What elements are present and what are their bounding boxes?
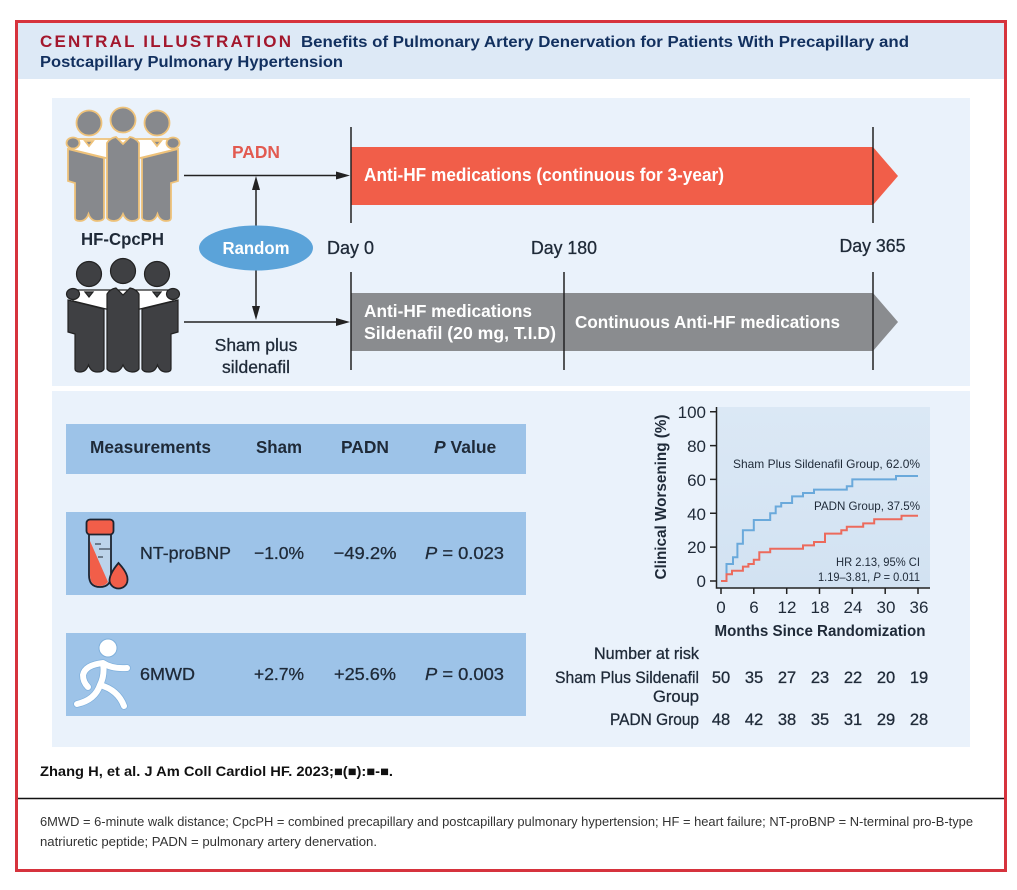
label: PADN: PADN xyxy=(232,142,280,162)
random ellipse: Random xyxy=(222,238,290,258)
random ellipse xyxy=(199,226,313,270)
y axis ticks: 60 xyxy=(687,471,706,490)
abbreviations footnote: 6MWD = 6-minute walk distance; CpcPH = combined precapillary and postcapillary pulmonary hypertension; HF = heart failure; NT-proBNP = N-terminal pro-B-type xyxy=(40,815,973,829)
timeline markers xyxy=(351,127,873,370)
bar: sham medications gray: Sildenafil (20 mg, T.I.D) xyxy=(364,323,556,343)
row text: NT-proBNP xyxy=(140,543,231,563)
icon: blood test tube xyxy=(86,520,128,589)
x axis ticks: 36 xyxy=(910,598,928,617)
chart annotations: PADN Group, 37.5% xyxy=(814,499,920,513)
y axis ticks: 100 xyxy=(678,403,706,422)
row text: P = 0.003 xyxy=(425,664,504,684)
x axis ticks: 12 xyxy=(778,598,796,617)
timeline day labels xyxy=(327,236,906,258)
number at risk table: 19 xyxy=(910,669,928,687)
number at risk table: 23 xyxy=(811,669,829,687)
chart annotations: Sham Plus Sildenafil Group, 62.0% xyxy=(733,457,920,471)
number at risk table: 20 xyxy=(877,669,895,687)
table header row xyxy=(66,424,526,474)
x axis ticks: 0 xyxy=(716,598,726,617)
x axis ticks xyxy=(716,598,928,617)
row text: 6MWD xyxy=(140,664,195,684)
row text xyxy=(140,543,504,563)
x axis ticks: 18 xyxy=(811,598,829,617)
y axis ticks: 0 xyxy=(697,572,706,591)
y axis ticks: 40 xyxy=(687,505,706,524)
row text: −49.2% xyxy=(334,543,396,563)
row text: +25.6% xyxy=(334,664,396,684)
y axis title: Clinical Worsening (%) xyxy=(653,414,670,580)
x axis ticks: 24 xyxy=(844,598,862,617)
timeline day labels: Day 0 xyxy=(327,238,374,258)
y axis ticks xyxy=(678,403,706,591)
bar: sham medications gray: Anti-HF medications xyxy=(364,301,532,321)
line: sham plus sildenafil xyxy=(721,476,918,581)
label: sham plus sildenafil: sildenafil xyxy=(222,357,290,377)
icon: walking person xyxy=(77,639,127,706)
number at risk table: 38 xyxy=(778,711,796,729)
citation: Zhang H, et al. J Am Coll Cardiol HF. 2023;■(■):■-■. xyxy=(40,764,393,779)
row text: −1.0% xyxy=(254,543,304,563)
timeline day labels: Day 180 xyxy=(531,238,597,258)
number at risk table: Group xyxy=(653,688,699,706)
row text xyxy=(140,664,504,684)
panel: trial design xyxy=(52,98,970,386)
arrow: PADN to medication xyxy=(184,172,350,180)
table header row: P Value xyxy=(434,437,497,457)
number at risk table: 27 xyxy=(778,669,796,687)
number at risk table: 35 xyxy=(745,669,763,687)
heading: central illustration label: CENTRAL ILLUSTRATION xyxy=(40,32,291,51)
x axis title: Months Since Randomization xyxy=(714,623,926,640)
label: HF-CpcPH: HF-CpcPH xyxy=(81,229,164,249)
bar: sham medications gray: Continuous Anti-HF medications xyxy=(575,312,840,332)
chart annotations xyxy=(733,457,920,584)
chart axes xyxy=(710,407,930,594)
table row: 6MWD xyxy=(66,633,526,716)
title band xyxy=(18,23,1004,79)
y axis ticks: 20 xyxy=(687,538,706,557)
heading: title text: Postcapillary Pulmonary Hypertension xyxy=(40,54,343,71)
bar: sham medications gray xyxy=(351,293,898,351)
abbreviations footnote: natriuretic peptide; PADN = pulmonary artery denervation. xyxy=(40,835,377,849)
table header row: PADN xyxy=(341,437,389,457)
bar: anti-HF medications red: Anti-HF medications (continuous for 3-year) xyxy=(364,165,724,185)
chart: clinical worsening xyxy=(653,403,930,640)
number at risk table: 50 xyxy=(712,669,730,687)
heading: title text: Benefits of Pulmonary Artery Denervation for Patients With Precapillary and xyxy=(301,34,909,51)
number at risk table: Sham Plus Sildenafil xyxy=(555,669,699,687)
heading: title text xyxy=(40,34,909,71)
line: PADN xyxy=(721,516,918,581)
number at risk table: 48 xyxy=(712,711,730,729)
number at risk table xyxy=(555,645,928,729)
number at risk table: 22 xyxy=(844,669,862,687)
label: sham plus sildenafil: Sham plus xyxy=(215,335,298,355)
table header row: Measurements xyxy=(90,437,211,457)
x axis ticks: 30 xyxy=(877,598,895,617)
chart annotations: HR 2.13, 95% CI xyxy=(836,555,920,569)
number at risk table: 42 xyxy=(745,711,763,729)
table header row: Sham xyxy=(256,437,302,457)
table row: NT-proBNP xyxy=(66,512,526,595)
timeline day labels: Day 365 xyxy=(840,236,906,256)
y axis ticks: 80 xyxy=(687,437,706,456)
divider line xyxy=(18,798,1004,800)
arrow: random up xyxy=(252,176,260,226)
number at risk table: Number at risk xyxy=(594,645,700,663)
number at risk table: 35 xyxy=(811,711,829,729)
panel: outcomes xyxy=(52,391,970,747)
arrow: sham to medication xyxy=(184,318,350,326)
bar: anti-HF medications red xyxy=(351,147,898,205)
abbreviations footnote xyxy=(40,815,973,849)
x axis ticks: 6 xyxy=(749,598,759,617)
icon: sham patient group xyxy=(66,258,180,372)
chart annotations: 1.19–3.81, P = 0.011 xyxy=(818,570,920,584)
number at risk table: PADN Group xyxy=(610,711,699,729)
row text: P = 0.023 xyxy=(425,543,504,563)
row text: +2.7% xyxy=(254,664,304,684)
number at risk table: 28 xyxy=(910,711,928,729)
arrow: random down xyxy=(252,270,260,320)
number at risk table: 29 xyxy=(877,711,895,729)
icon: PADN patient group xyxy=(66,108,180,221)
number at risk table: 31 xyxy=(844,711,862,729)
